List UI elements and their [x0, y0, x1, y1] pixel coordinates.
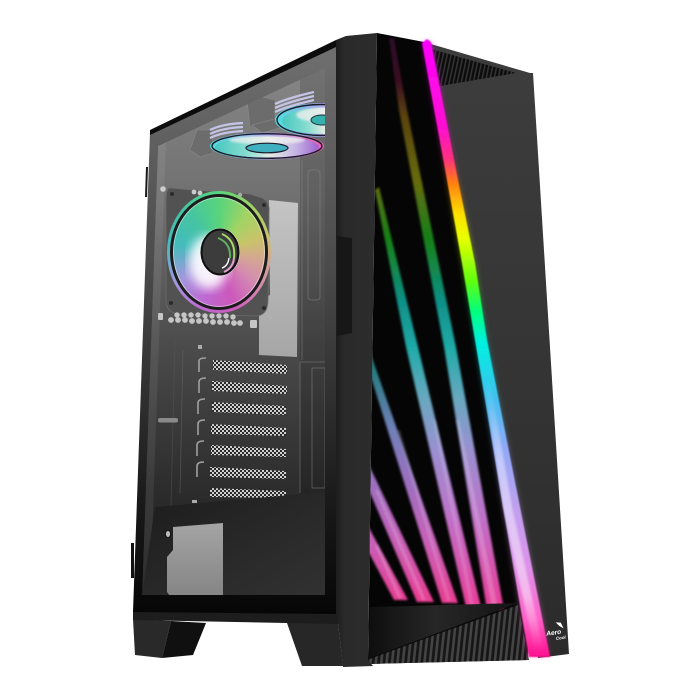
honeycomb vent [158, 312, 257, 328]
front black panel [368, 33, 530, 664]
top fan rear [275, 103, 325, 137]
case interior [142, 80, 325, 595]
thumb screw [158, 418, 178, 422]
PSU plate [165, 523, 223, 596]
Aerocool logo: Aero [545, 629, 562, 638]
radiator plate [259, 200, 298, 357]
diagonal light bars [368, 38, 504, 610]
right side panel [424, 42, 569, 658]
Aerocool logo [544, 621, 567, 642]
PC case illustration [131, 33, 569, 667]
door handle recess [337, 236, 352, 336]
top fan front [210, 132, 324, 160]
slot clips [192, 345, 206, 503]
rear column details [171, 160, 325, 505]
front pillar [336, 33, 377, 667]
RGB light strip [422, 39, 550, 657]
top fan stacked ring stripes [210, 92, 314, 138]
glass top edge [150, 40, 336, 135]
lower front panel with grille [368, 603, 529, 664]
tempered glass panel [131, 40, 336, 614]
PSU shroud [142, 492, 325, 595]
feet and base [133, 610, 343, 666]
Aerocool logo: Cool [556, 635, 567, 641]
top vent grille [431, 49, 516, 86]
big RGB fan [165, 190, 275, 316]
top mounts [190, 97, 290, 157]
PCI slot covers [210, 360, 287, 498]
big fan frame [160, 186, 269, 316]
